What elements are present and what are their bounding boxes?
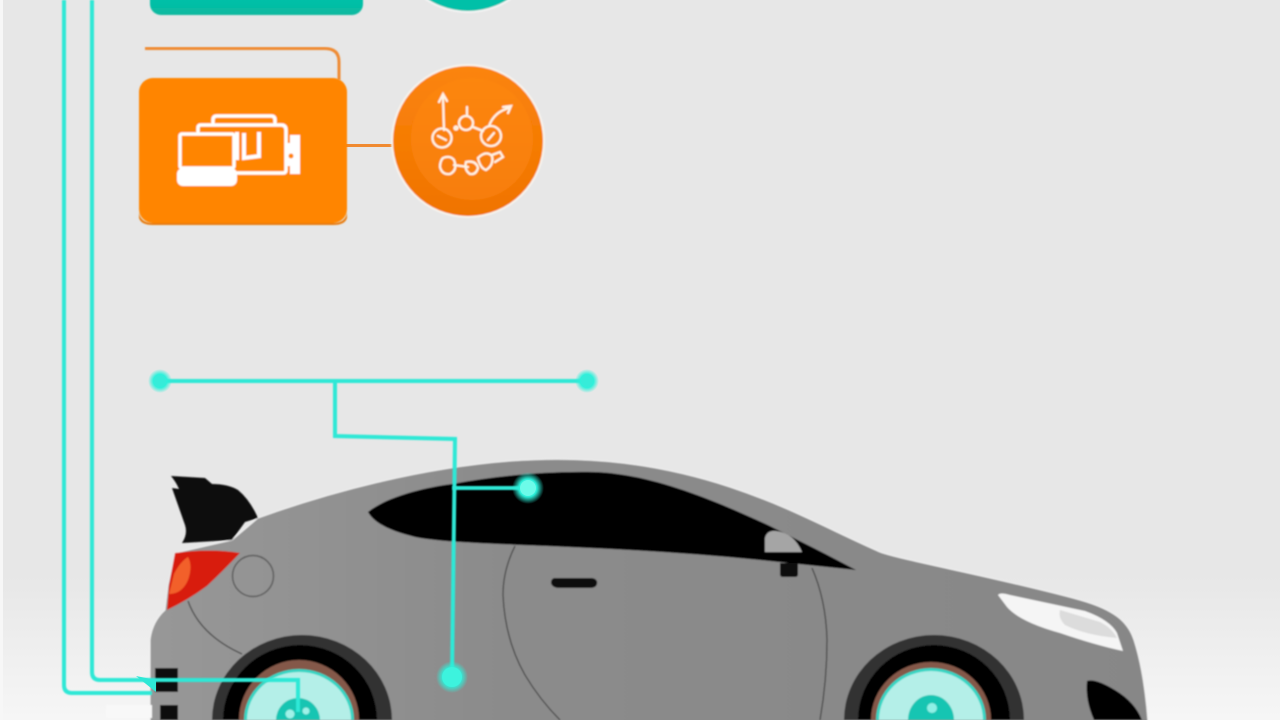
play diagram doodle <box>432 94 511 174</box>
circuit lines <box>64 0 587 712</box>
body line <box>188 601 242 654</box>
headlight <box>998 594 1123 651</box>
door lines <box>503 546 827 720</box>
rear window <box>368 472 856 570</box>
tail light <box>167 550 240 610</box>
left line to rear vent <box>64 0 152 693</box>
panel: teal card (cropped at top) <box>150 0 363 15</box>
rear vents <box>155 668 178 720</box>
orange connector <box>346 144 395 147</box>
orange bracket line <box>145 48 339 80</box>
side mirror <box>765 531 802 577</box>
node: door <box>436 661 468 693</box>
fuel cap <box>232 556 274 596</box>
icon: teal circle (cropped at top) <box>393 0 543 12</box>
node: top bar right <box>575 369 599 393</box>
car body <box>150 459 1148 720</box>
fog lamp <box>1087 680 1142 720</box>
rear wheel <box>212 635 392 720</box>
icon: orange circle with play diagram <box>391 64 545 218</box>
node: window <box>512 472 544 504</box>
arrow tip on rear vent <box>136 676 156 692</box>
car <box>106 459 1148 720</box>
front wheel <box>844 635 1024 720</box>
spoiler <box>171 476 258 543</box>
second line to rear wheel <box>92 0 298 712</box>
icon: camera and laptop <box>177 116 300 186</box>
exhaust <box>106 705 152 718</box>
node: top bar left <box>148 369 172 393</box>
branch to car <box>335 381 455 677</box>
branch to window node <box>452 486 528 490</box>
top bar <box>160 379 587 383</box>
door handle <box>551 578 597 588</box>
panel: orange card with devices icon <box>139 78 347 225</box>
